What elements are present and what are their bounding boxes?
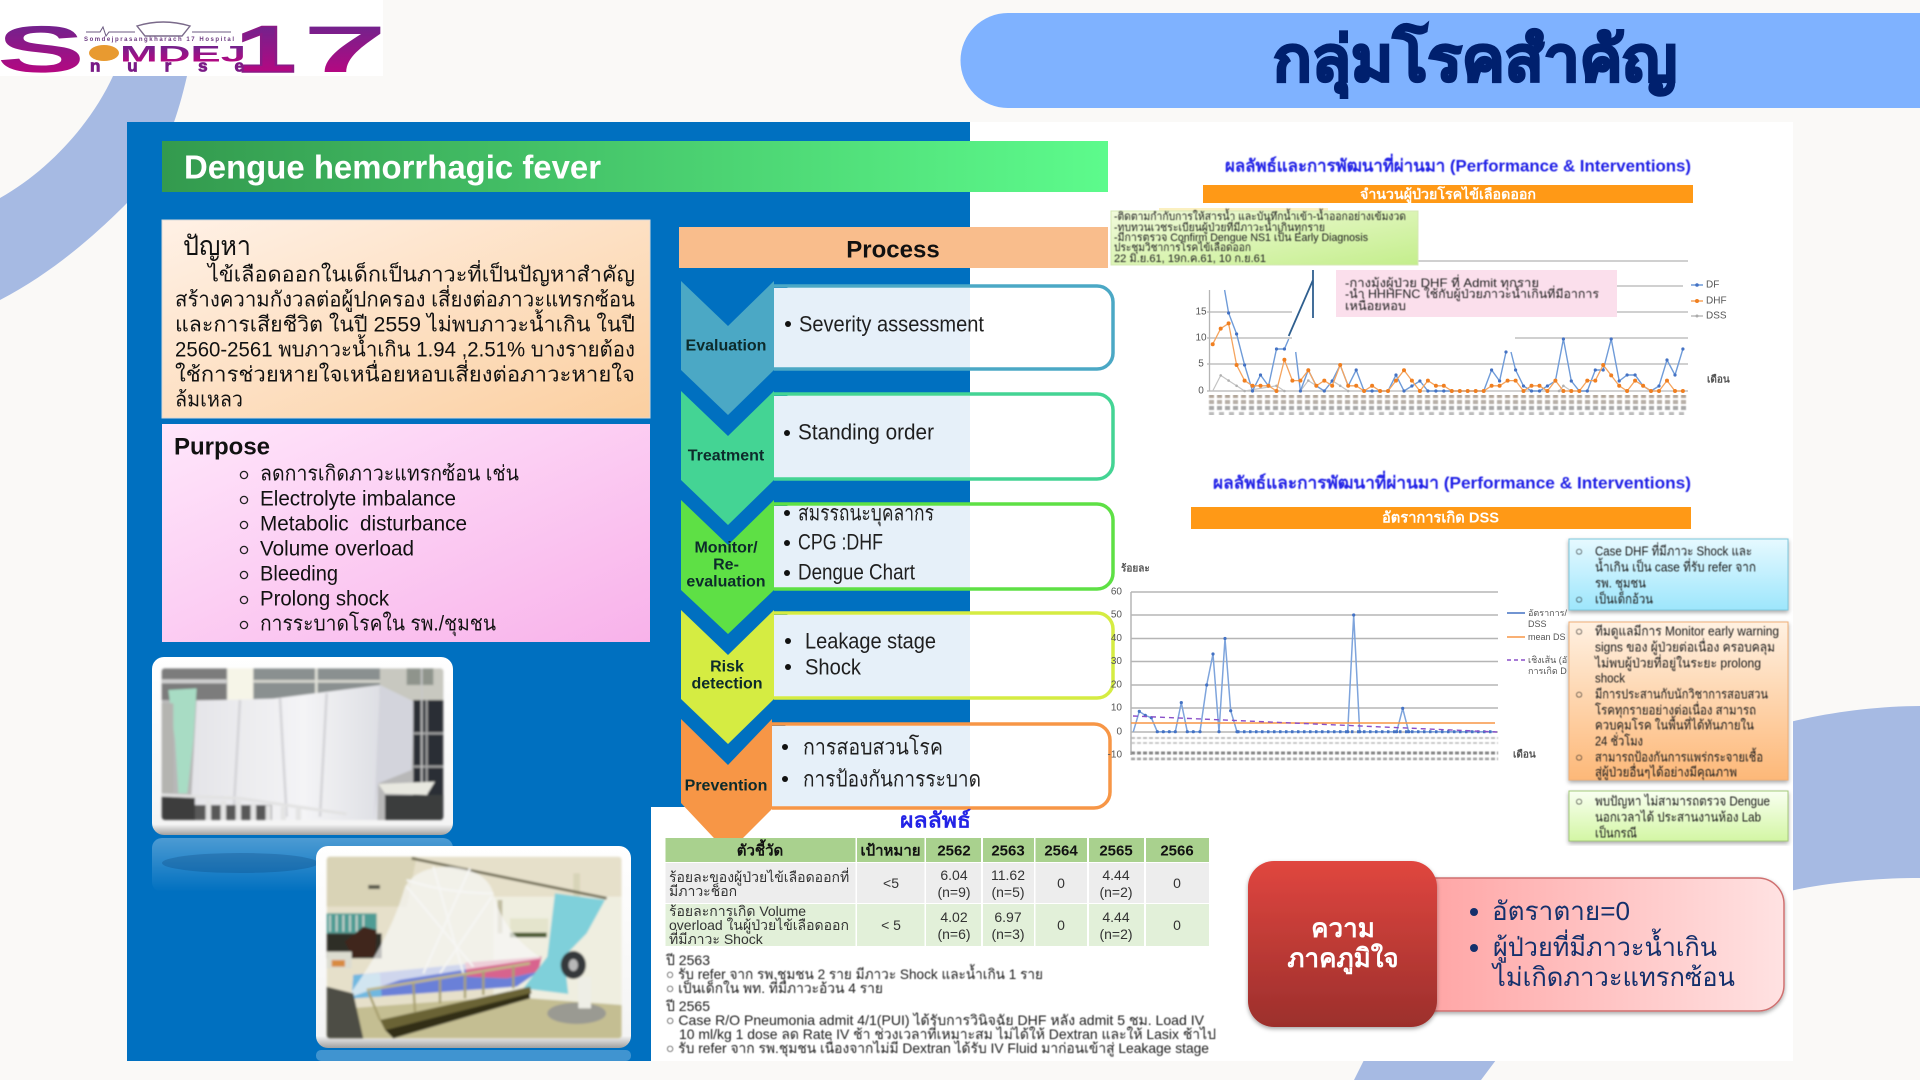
process step: Risk detection: Shock [805, 654, 862, 680]
table header row: 2564 [1044, 842, 1078, 860]
photo: patient bed with mosquito net dome [316, 846, 631, 1061]
table row: volume overload: (n=2) [1099, 926, 1133, 942]
problem body text: 2560-2561 พบภาวะน้ำเกิน 1.94 ,2.51% บางรายต้อง [175, 334, 635, 362]
purpose list: Volume overload [260, 538, 414, 560]
blue main panel [127, 122, 970, 1061]
pride label box: ภาคภูมิใจ [1287, 943, 1399, 975]
results notes: 10 ml/kg 1 dose ลด Rate IV ช้า ช่วงเวลาที่เหมาะสม ไม่ได้ให้ Dextran และให้ Lasix ช้าไป [679, 1025, 1216, 1042]
step box [774, 394, 1113, 479]
note: lab problem: พบปัญหา ไม่สามารถตรวจ Dengue [1595, 794, 1770, 808]
process step: Risk detection [681, 610, 1113, 744]
results notes: ปี 2563 [666, 952, 710, 968]
purpose list: Prolong shock [260, 588, 389, 610]
line chart: DSS rate: เดือน [1513, 748, 1536, 760]
chevron [681, 281, 774, 415]
callout: green note: -ติดตามกำกับการให้สารน้ำ และบันทึกน้ำเข้า-น้ำออกอย่างเข้มงวด [1114, 208, 1406, 223]
process step: Monitor / Re-evaluation: Dengue Chart [798, 560, 915, 584]
line chart: dengue cases [1195, 261, 1730, 414]
purpose list: Electrolyte imbalance [260, 488, 456, 510]
decorative arc left [0, 76, 187, 300]
note: case shock: น้ำเกิน เป็น case ที่รับ refer จาก [1595, 558, 1756, 574]
logo: 1 [236, 12, 296, 86]
line chart: DSS rate: 20 [1111, 680, 1122, 690]
note: case shock [1569, 539, 1788, 610]
orange bar: number of dengue patients: จำนวนผู้ป่วยโรคไข้เลือดออก [1360, 185, 1536, 203]
callout: pink note: เหนื่อยหอบ [1345, 297, 1406, 313]
table header row: 2566 [1160, 842, 1194, 860]
legend: mean DS [1528, 632, 1566, 642]
table row: volume overload: ร้อยละการเกิด Volume [669, 903, 806, 919]
process heading [679, 227, 1108, 268]
results notes: ○ รับ refer จาก รพ.ชุมชน เนื่องจากไม่มี Dextran ได้รับ IV Fluid มาก่อนเข้าสู่ Leakage stage [666, 1039, 1209, 1057]
heading bar: Dengue hemorrhagic fever: Dengue hemorrhagic fever [184, 148, 601, 186]
note: case shock: ○ [1575, 592, 1583, 606]
table row: shock: มีภาวะช็อก [669, 882, 737, 899]
table row: shock: 6.04 [940, 867, 968, 883]
legend: อัตราการ/ [1528, 608, 1567, 618]
series: DSS rate [1133, 615, 1495, 732]
note: early warning: สามารถป้องกันการแพร่กระจายเชื้อ [1595, 748, 1763, 764]
note: early warning: ○ [1575, 624, 1583, 638]
results notes: ○ เป็นเด็กใน พท. ที่มีภาวะอ้วน 4 ราย [666, 979, 883, 996]
x axis month labels [1209, 396, 1688, 414]
connector line [1289, 270, 1313, 336]
chevron [681, 391, 774, 525]
orange bar: DSS rate: อัตราการเกิด DSS [1382, 508, 1499, 526]
note: early warning: ทีมดูแลมีการ Monitor early warning [1595, 624, 1779, 640]
problem body text [175, 260, 635, 412]
line chart: dengue cases: 0 [1198, 386, 1204, 396]
step box [772, 724, 1110, 808]
table row: volume overload: 4.44 [1102, 909, 1130, 925]
line chart: DSS rate: 0 [1116, 726, 1122, 738]
x axis month labels [1131, 738, 1498, 759]
callout: pink note: -นำ HHHFNC ใช้กับผู้ป่วยภาวะน้ำเกินที่มีอาการ [1345, 285, 1600, 302]
purpose list: Metabolic disturbance [260, 512, 467, 536]
note: lab problem: นอกเวลาได้ ประสานงานห้อง Lab [1595, 810, 1761, 824]
line chart: DSS rate: 50 [1111, 610, 1122, 620]
process step: Evaluation: Evaluation [686, 338, 766, 354]
table row: volume overload: 0 [1057, 917, 1065, 933]
table row: shock: (n=9) [937, 884, 971, 900]
line chart: DSS rate: -10 [1108, 750, 1122, 760]
table row: shock: (n=5) [991, 884, 1025, 900]
results notes: ○ Case R/O Pneumonia admit 4/1(PUI) ได้รับการวินิจฉัย DHF หลัง admit 5 ชม. Load IV [666, 1012, 1205, 1028]
table row: volume overload: 4.02 [940, 909, 968, 925]
purpose heading: Purpose [174, 434, 270, 460]
callout: faint yellow backing [1159, 208, 1328, 213]
results heading: ผลลัพธ์ [900, 808, 971, 832]
pride content box: อัตราตาย=0 [1492, 896, 1630, 926]
note: early warning: ควบคุมโรค ในพื้นที่ได้ทันภายใน [1595, 716, 1754, 734]
table header row: 2562 [937, 842, 971, 860]
photo: mosquito net over ward bed [152, 657, 453, 892]
process step: Monitor / Re-evaluation: Monitor/ [694, 540, 758, 556]
table header row: เป้าหมาย [860, 842, 921, 860]
process step: Monitor / Re-evaluation: evaluation [686, 574, 766, 590]
results table [666, 838, 1209, 947]
line chart: DSS rate: 30 [1111, 656, 1122, 667]
pride content box [1420, 878, 1784, 1011]
problem heading: ปัญหา [183, 231, 251, 261]
legend: DHF [1706, 296, 1727, 306]
results notes [666, 952, 1216, 1057]
table row: shock: 0 [1173, 875, 1181, 891]
logo: 7 [303, 12, 387, 86]
purpose list: Bleeding [260, 562, 338, 586]
process step: Prevention: การป้องกันการระบาด [803, 766, 981, 792]
purpose list [240, 462, 519, 636]
callout: pink note: -กางมุ้งผู้ป่วย DHF ที่ Admit ทุกราย [1345, 274, 1539, 291]
decorative arc right [1790, 706, 1920, 891]
table row: volume overload: 6.97 [994, 909, 1022, 925]
line chart: DSS rate: 60 [1111, 586, 1122, 598]
step box [774, 613, 1113, 698]
note: early warning: โรคทุกรายอย่างต่อเนื่อง สามารถ [1595, 702, 1756, 718]
step box [774, 504, 1113, 589]
title banner: กลุ่มโรคสำคัญ [1273, 22, 1677, 98]
process step: Evaluation: Severity assessment [799, 312, 984, 336]
legend: DSS [1706, 310, 1727, 322]
process step: Evaluation [681, 281, 1113, 415]
note: early warning: มีการประสานกับนักวิชาการสอบสวน [1595, 686, 1768, 702]
line chart: DSS rate: ร้อยละ [1121, 562, 1150, 574]
pride content box: ผู้ป่วยที่มีภาวะน้ำเกิน [1493, 928, 1717, 963]
legend: การเกิด D [1528, 666, 1567, 676]
logo [0, 0, 387, 86]
note: lab problem [1569, 791, 1788, 841]
callout: green note [1111, 208, 1418, 265]
process step: Treatment: Standing order [798, 420, 934, 444]
callout: green note: -มีการตรวจ Confirm Dengue NS1 เป็น Early Diagnosis [1114, 230, 1368, 244]
table header row: 2565 [1099, 842, 1133, 860]
note: case shock: เป็นเด็กอ้วน [1595, 590, 1653, 606]
pride content box: ไม่เกิดภาวะแทรกซ้อน [1491, 962, 1735, 992]
line chart: DSS rate: 10 [1111, 702, 1122, 714]
mean line [1131, 722, 1495, 724]
problem body text: และการเสียชีวิต ในปี 2559 ไม่พบภาวะน้ำเกิน ในปี [175, 310, 635, 336]
process step: Prevention [681, 719, 1110, 853]
legend [1691, 280, 1727, 322]
line chart: dengue cases: 5 [1198, 358, 1204, 370]
logo: MDEJ [120, 42, 246, 66]
table row: shock: ร้อยละของผู้ป่วยไข้เลือดออกที่ [669, 868, 849, 886]
legend: DSS [1528, 619, 1547, 629]
callout: green note: ประชุมวิชาการโรคไข้เลือดออก [1114, 240, 1251, 254]
process step: Monitor / Re-evaluation: CPG :DHF [798, 530, 883, 554]
table row: shock: 4.44 [1102, 867, 1130, 883]
legend [1507, 608, 1567, 676]
table row: volume overload: overload ในผู้ป่วยไข้เลือดออก [669, 917, 849, 934]
table row: shock: 0 [1057, 875, 1065, 891]
process step: Monitor / Re-evaluation: สมรรถนะบุคลากร [798, 500, 934, 526]
process step: Monitor / Re-evaluation [681, 500, 1113, 634]
process step: Risk detection: detection [691, 676, 763, 692]
process step: Prevention: Prevention [685, 778, 767, 794]
note: early warning: สู่ผู้ป่วยอื่นๆได้อย่างมีคุณภาพ [1595, 764, 1737, 780]
panel: purpose [162, 424, 650, 642]
table row: volume overload: 0 [1173, 917, 1181, 933]
process step: Treatment: Treatment [688, 448, 765, 464]
pride callout [1248, 861, 1784, 1027]
title banner [961, 13, 1920, 108]
step box [774, 286, 1113, 369]
table header row [666, 838, 1209, 862]
note: early warning: ○ [1575, 686, 1583, 702]
series: DF [1225, 290, 1683, 391]
problem body text: สร้างความกังวลต่อผู้ปกครอง เสี่ยงต่อภาวะแทรกซ้อน [175, 284, 635, 312]
callout: green note: -ทบทวนเวชระเบียนผู้ป่วยที่มีภาวะน้ำเกินทุกราย [1114, 219, 1325, 234]
process step: Risk detection: Risk [710, 658, 744, 676]
logo: nurse [90, 56, 244, 76]
decorative bottom strip [1354, 1060, 1496, 1080]
table row: shock [666, 863, 1209, 903]
table row: shock: 11.62 [991, 867, 1025, 883]
table row: volume overload: (n=3) [991, 926, 1025, 942]
line chart: DSS rate [1108, 562, 1567, 760]
table header row: 2563 [991, 842, 1025, 860]
line chart: DSS rate: 40 [1111, 633, 1122, 644]
legend: DF [1706, 280, 1719, 290]
problem body text: ใช้การช่วยหายใจเหนื่อยหอบเสี่ยงต่อภาวะหายใจ [175, 360, 635, 386]
callout: pink note [1336, 270, 1617, 317]
series: DSS [1213, 375, 1683, 391]
table row: volume overload: < 5 [881, 917, 901, 933]
process heading: Process [846, 236, 940, 264]
heading bar: Dengue hemorrhagic fever [162, 141, 1108, 192]
orange bar: DSS rate [1191, 507, 1691, 529]
heading: performance and interventions 2: ผลลัพธ์และการพัฒนาที่ผ่านมา (Performance & Interventions) [1213, 470, 1691, 492]
white results panel [650, 122, 1793, 1061]
table row: volume overload: (n=6) [937, 926, 971, 942]
note: early warning: ไม่พบผู้ป่วยที่อยู่ในระยะ prolong [1594, 654, 1761, 672]
table row: volume overload [666, 903, 1209, 947]
table row: shock: (n=2) [1099, 884, 1133, 900]
chevron [681, 610, 774, 744]
table header row: ตัวชี้วัด [737, 838, 783, 860]
panel: problem [162, 220, 650, 418]
process step: Prevention: การสอบสวนโรค [803, 734, 943, 760]
note: early warning [1569, 622, 1788, 780]
pride label box [1248, 861, 1437, 1027]
note: lab problem: ○ [1575, 794, 1583, 808]
heading: performance and interventions 1: ผลลัพธ์และการพัฒนาที่ผ่านมา (Performance & Interventions) [1225, 154, 1691, 176]
trend line [1133, 716, 1497, 732]
table row: volume overload: ที่มีภาวะ Shock [669, 930, 764, 947]
problem body text: ล้มเหลว [175, 388, 243, 412]
pride label box: ความ [1311, 913, 1375, 943]
note: lab problem: เป็นกรณี [1595, 824, 1637, 840]
line chart: dengue cases: 10 [1195, 332, 1207, 344]
note: early warning: shock [1595, 670, 1625, 686]
process step: Risk detection: Leakage stage [805, 628, 936, 654]
purpose list: การระบาดโรคใน รพ./ชุมชน [260, 612, 496, 636]
chevron [681, 719, 772, 853]
table row: shock: <5 [883, 875, 899, 891]
logo: Somdejprasangkharach 17 Hospital [84, 37, 234, 43]
purpose list: ลดการเกิดภาวะแทรกซ้อน เช่น [260, 462, 519, 486]
results notes: ○ รับ refer จาก รพ.ชุมชน 2 ราย มีภาวะ Shock และน้ำเกิน 1 ราย [666, 964, 1043, 983]
problem body text: ไข้เลือดออกในเด็กเป็นภาวะที่เป็นปัญหาสำคัญ [206, 260, 635, 286]
note: early warning: 24 ชั่วโมง [1595, 732, 1643, 748]
note: case shock: รพ. ชุมชน [1595, 576, 1646, 592]
legend: เชิงเส้น (อั [1528, 655, 1567, 665]
note: early warning: signs ของ ผู้ป่วยต่อเนื่อง ครอบคลุม [1595, 638, 1775, 656]
callout: green note: 22 มิ.ย.61, 19ก.ค.61, 10 ก.ย.61 [1114, 253, 1266, 265]
process step: Monitor / Re-evaluation: Re- [713, 556, 739, 574]
note: case shock: Case DHF ที่มีภาวะ Shock และ [1595, 542, 1752, 558]
line chart: dengue cases: เดือน [1707, 374, 1730, 386]
note: early warning: ○ [1575, 750, 1583, 764]
line chart: dengue cases: 15 [1195, 306, 1207, 318]
orange bar: number of dengue patients [1203, 185, 1693, 203]
chevron [681, 500, 774, 634]
series: DHF [1213, 323, 1683, 391]
note: case shock: ○ [1575, 544, 1583, 558]
results notes: ปี 2565 [666, 998, 710, 1014]
process step: Treatment [681, 391, 1113, 525]
